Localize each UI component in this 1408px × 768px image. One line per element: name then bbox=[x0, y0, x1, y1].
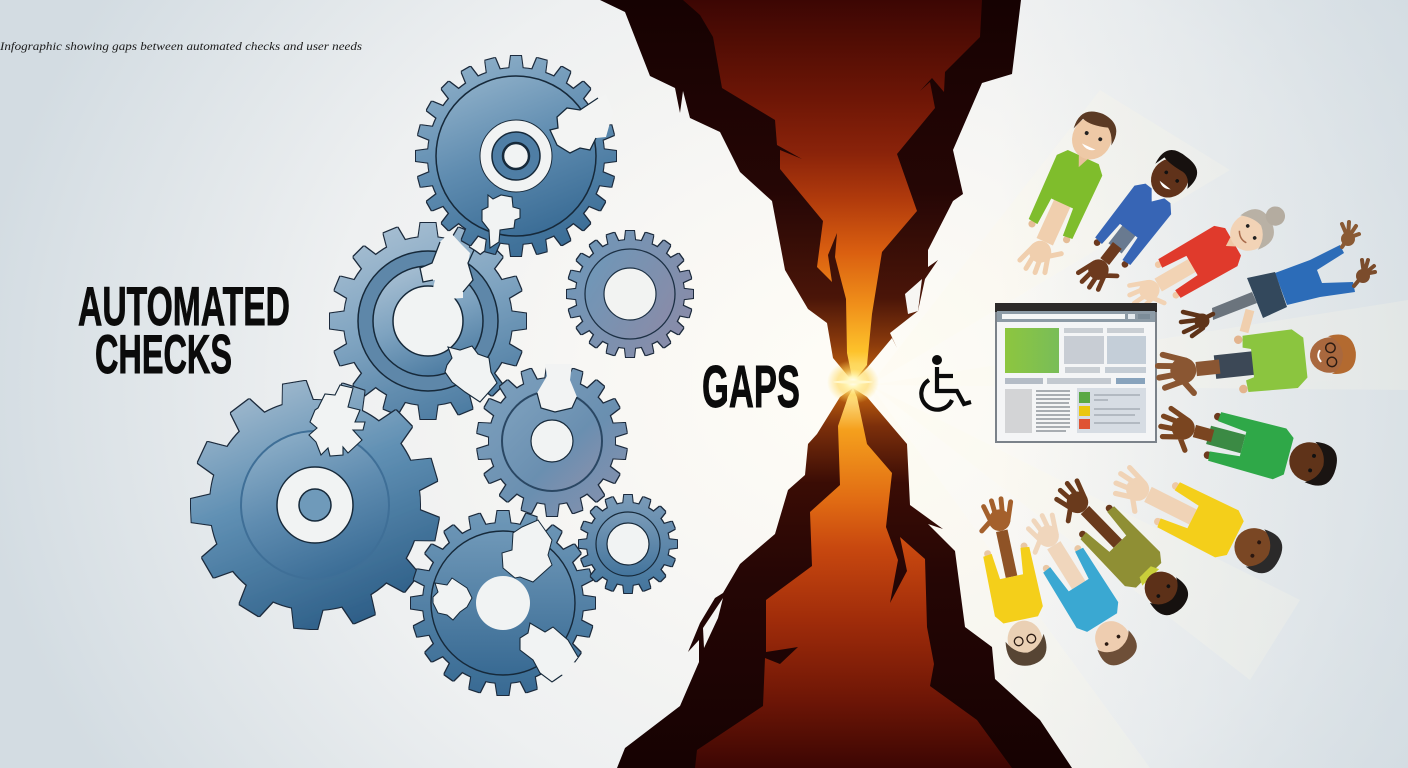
heading: automated checks bbox=[78, 275, 290, 385]
gear: top bbox=[416, 56, 616, 256]
gear: lower centre bbox=[411, 511, 595, 695]
crack upper gap bbox=[905, 279, 922, 314]
person: yellow shirt bbox=[1106, 456, 1291, 583]
person: cyan shirt bbox=[1016, 506, 1147, 674]
person: olive shirt bbox=[1046, 470, 1199, 626]
crack lower gap bbox=[703, 598, 723, 648]
crack lower dark edge bbox=[617, 388, 1072, 768]
gear: middle right bbox=[477, 364, 627, 516]
caption: Infographic showing gaps between automated checks and user needs bbox=[0, 41, 363, 53]
person: red dress with bun bbox=[1121, 192, 1296, 320]
glow at the pinch point bbox=[827, 360, 879, 404]
person: blue sweater bbox=[1068, 143, 1205, 299]
background tint on the right side bbox=[1000, 0, 1408, 768]
icon: wheelchair bbox=[921, 355, 971, 410]
person: yellow shirt with glasses bbox=[971, 495, 1054, 670]
gear: large bbox=[191, 381, 439, 629]
heading: gaps: GAPS bbox=[702, 354, 800, 420]
heading: automated checks: AUTOMATED bbox=[78, 275, 290, 337]
crack lower molten core bbox=[695, 388, 1012, 768]
light rays from the monitor bbox=[870, 90, 1408, 768]
person: blue shirt, dark skirt bbox=[1181, 222, 1375, 336]
gear: lower right small bbox=[579, 495, 677, 593]
person: green shirt bbox=[1009, 104, 1126, 281]
heading: automated checks: CHECKS bbox=[95, 323, 232, 385]
chasm crack bbox=[600, 0, 1072, 768]
gear: middle left bbox=[330, 223, 526, 419]
gears cluster bbox=[191, 56, 693, 695]
crack upper molten core bbox=[683, 0, 982, 382]
person: light green shirt with glasses bbox=[1156, 323, 1359, 402]
person: green shirt, dark hair bbox=[1155, 397, 1342, 494]
crack upper dark edge bbox=[600, 0, 1021, 382]
monitor bbox=[995, 303, 1157, 443]
gear: right small upper bbox=[567, 231, 693, 357]
